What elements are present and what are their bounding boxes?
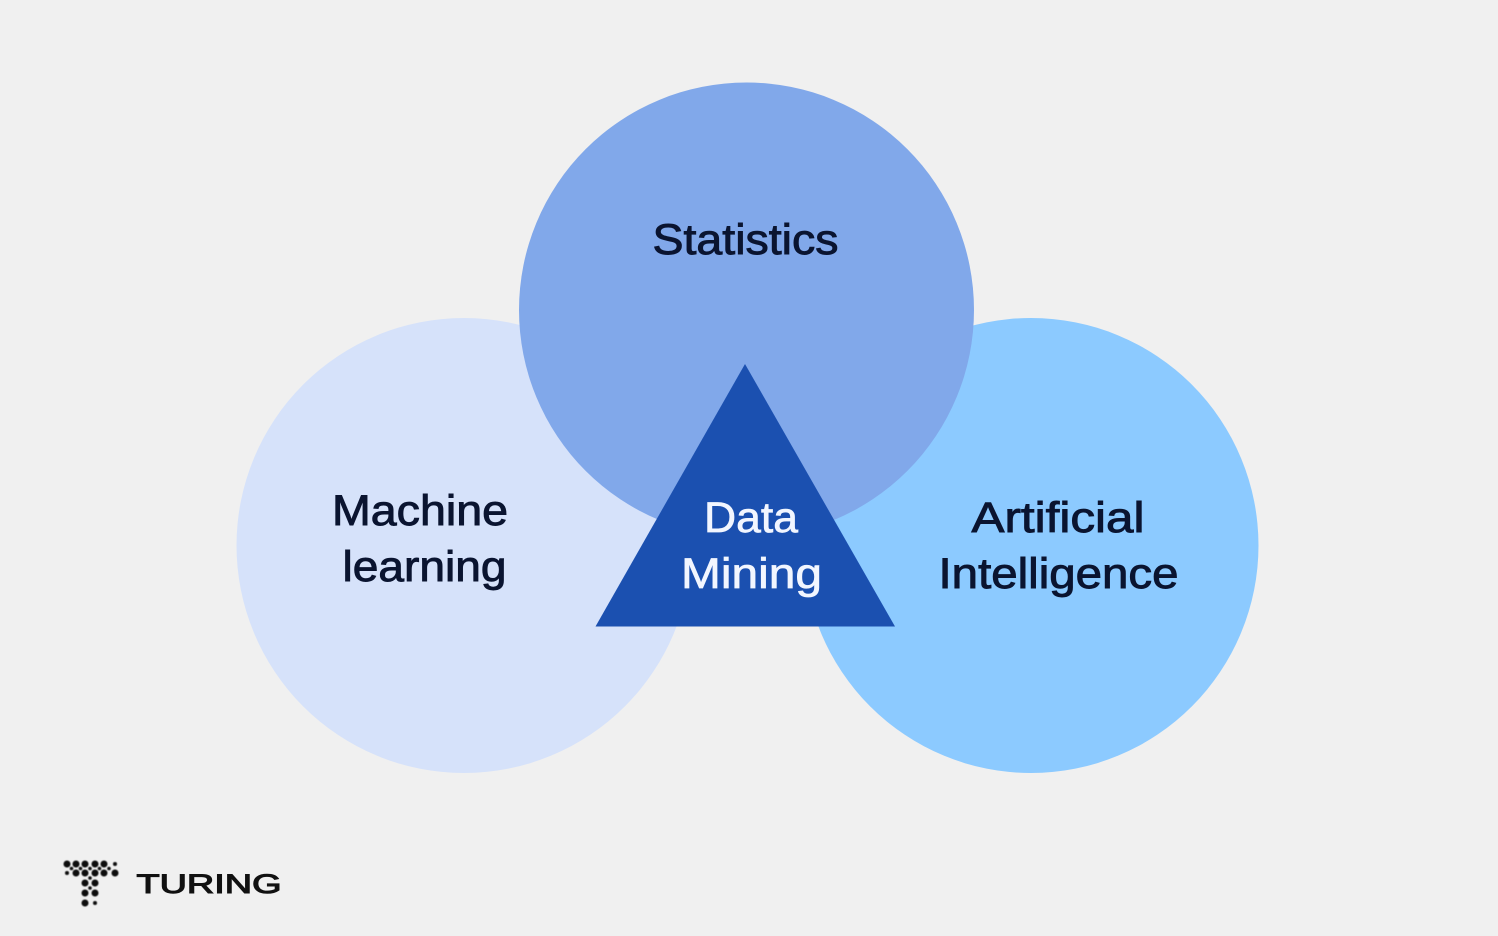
circle: machine learning: [236, 318, 692, 773]
wordmark: TURING: [136, 869, 282, 899]
label: machine learning: Machine: [332, 487, 508, 535]
label: artificial intelligence: Intelligence: [938, 550, 1178, 598]
triangle: data mining: [596, 364, 895, 626]
label: data mining: Mining: [681, 550, 822, 598]
label: machine learning: learning: [342, 543, 506, 591]
icon: dotted T: [64, 860, 118, 906]
label: artificial intelligence: [938, 494, 1178, 598]
label: data mining: [681, 494, 822, 598]
label: machine learning: [332, 487, 508, 591]
circle: artificial intelligence: [804, 318, 1258, 773]
label: statistics: Statistics: [652, 216, 838, 264]
label: data mining: Data: [704, 494, 798, 542]
logo: turing: [64, 860, 282, 906]
circle: statistics: [519, 82, 974, 538]
label: artificial intelligence: Artificial: [972, 494, 1144, 542]
